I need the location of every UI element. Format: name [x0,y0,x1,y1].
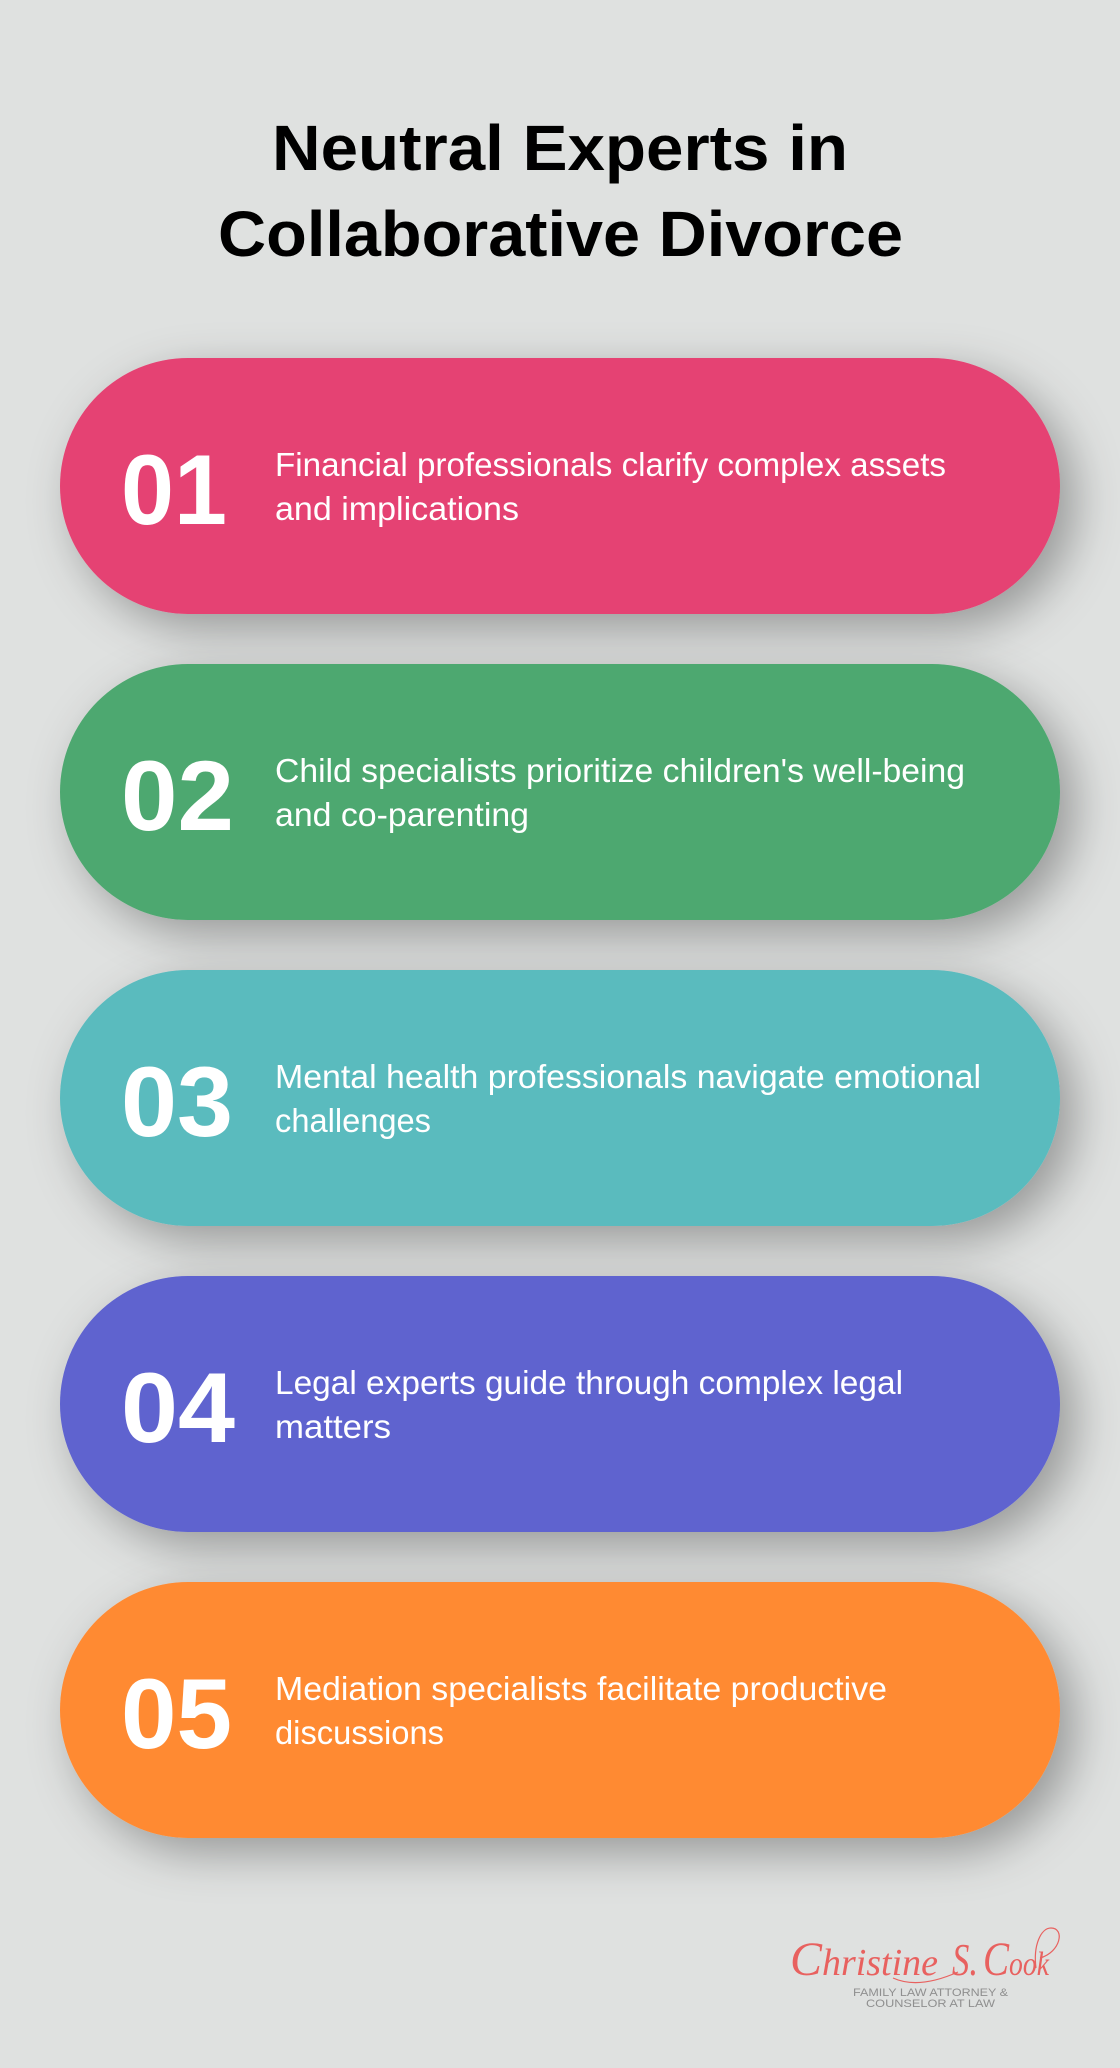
text: child specialists: and co-parenting [275,797,529,834]
text: child specialists: Child specialists prioritize children's well-being [275,753,965,790]
text: legal experts: Legal experts guide through complex legal [275,1365,903,1402]
number 03: 03 [121,1046,233,1157]
logo: Christine S. Cook [790,1928,1059,2010]
panel: 05 mediation specialists [60,1582,1060,1838]
logo: Christine S. Cook: FAMILY LAW ATTORNEY & [853,1987,1009,1999]
text: mental health professionals [275,1059,981,1140]
panel: 04 legal experts [60,1276,1060,1532]
panel: 02 child specialists [60,664,1060,920]
text: financial professionals: Financial professionals clarify complex assets [275,447,946,484]
logo: Christine S. Cook: S. [952,1934,978,1985]
text: mental health professionals: challenges [275,1103,431,1140]
text: mediation specialists [275,1671,887,1752]
text: financial professionals [275,447,946,528]
text: financial professionals: and implications [275,491,519,528]
text: legal experts: matters [275,1409,391,1446]
title: Collaborative Divorce [218,198,903,270]
number 04: 04 [121,1352,235,1463]
text: child specialists [275,753,965,834]
logo: Christine S. Cook: COUNSELOR AT LAW [866,1998,996,2010]
text: legal experts [275,1365,903,1446]
title [218,112,903,270]
logo: Christine S. Cook: Christine [790,1933,938,1986]
logo: Christine S. Cook: Cook [983,1933,1050,1986]
panel: 03 mental health professionals [60,970,1060,1226]
number 02: 02 [121,740,234,851]
text: mediation specialists: Mediation specialists facilitate productive [275,1671,887,1708]
panel: 01 financial professionals [60,358,1060,614]
text: mediation specialists: discussions [275,1715,444,1752]
text: mental health professionals: Mental health professionals navigate emotional [275,1059,981,1096]
number 05: 05 [121,1658,232,1769]
title: Neutral Experts in [272,112,848,184]
number 01: 01 [121,434,227,545]
